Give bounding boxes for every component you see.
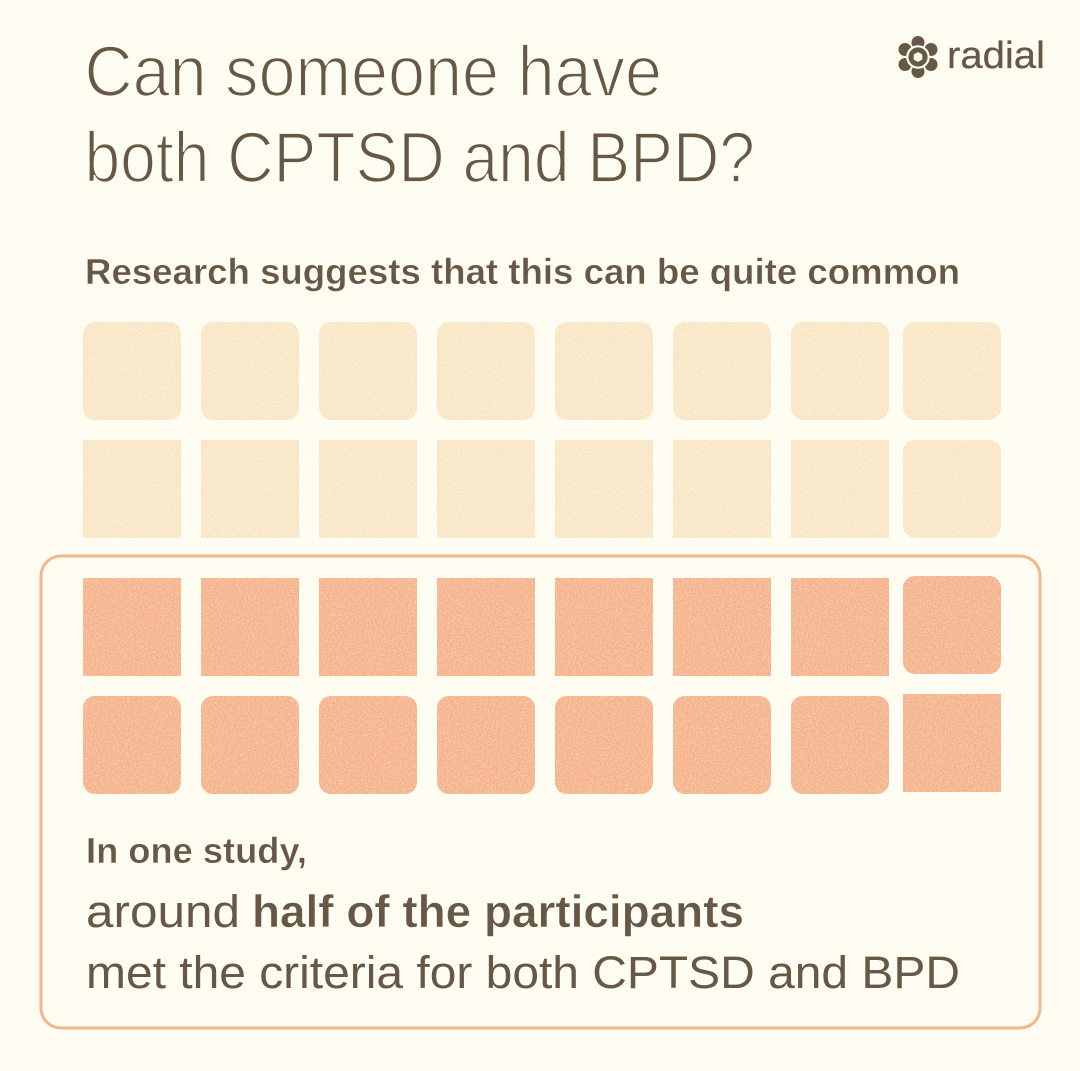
title <box>84 33 755 198</box>
grid: light squares (top half of participants) <box>83 322 1001 538</box>
callout text: study finding: half of the participants <box>252 886 744 937</box>
callout text: study finding: met the criteria for both CPTSD and BPD <box>86 947 960 998</box>
logo: radial <box>898 35 1045 78</box>
icon: radial flower <box>898 36 938 78</box>
callout text: study finding: In one study, <box>86 830 307 871</box>
wordmark: radial <box>947 35 1045 77</box>
panel: highlighted study outline <box>41 556 1040 1028</box>
callout text: study finding <box>86 830 960 998</box>
subheading: Research suggests that this can be quite common <box>85 251 960 292</box>
title: both CPTSD and BPD? <box>84 119 755 198</box>
callout text: study finding: around <box>86 886 240 937</box>
title: Can someone have <box>84 33 662 112</box>
grid: orange squares (half with both diagnoses) <box>83 576 1001 794</box>
